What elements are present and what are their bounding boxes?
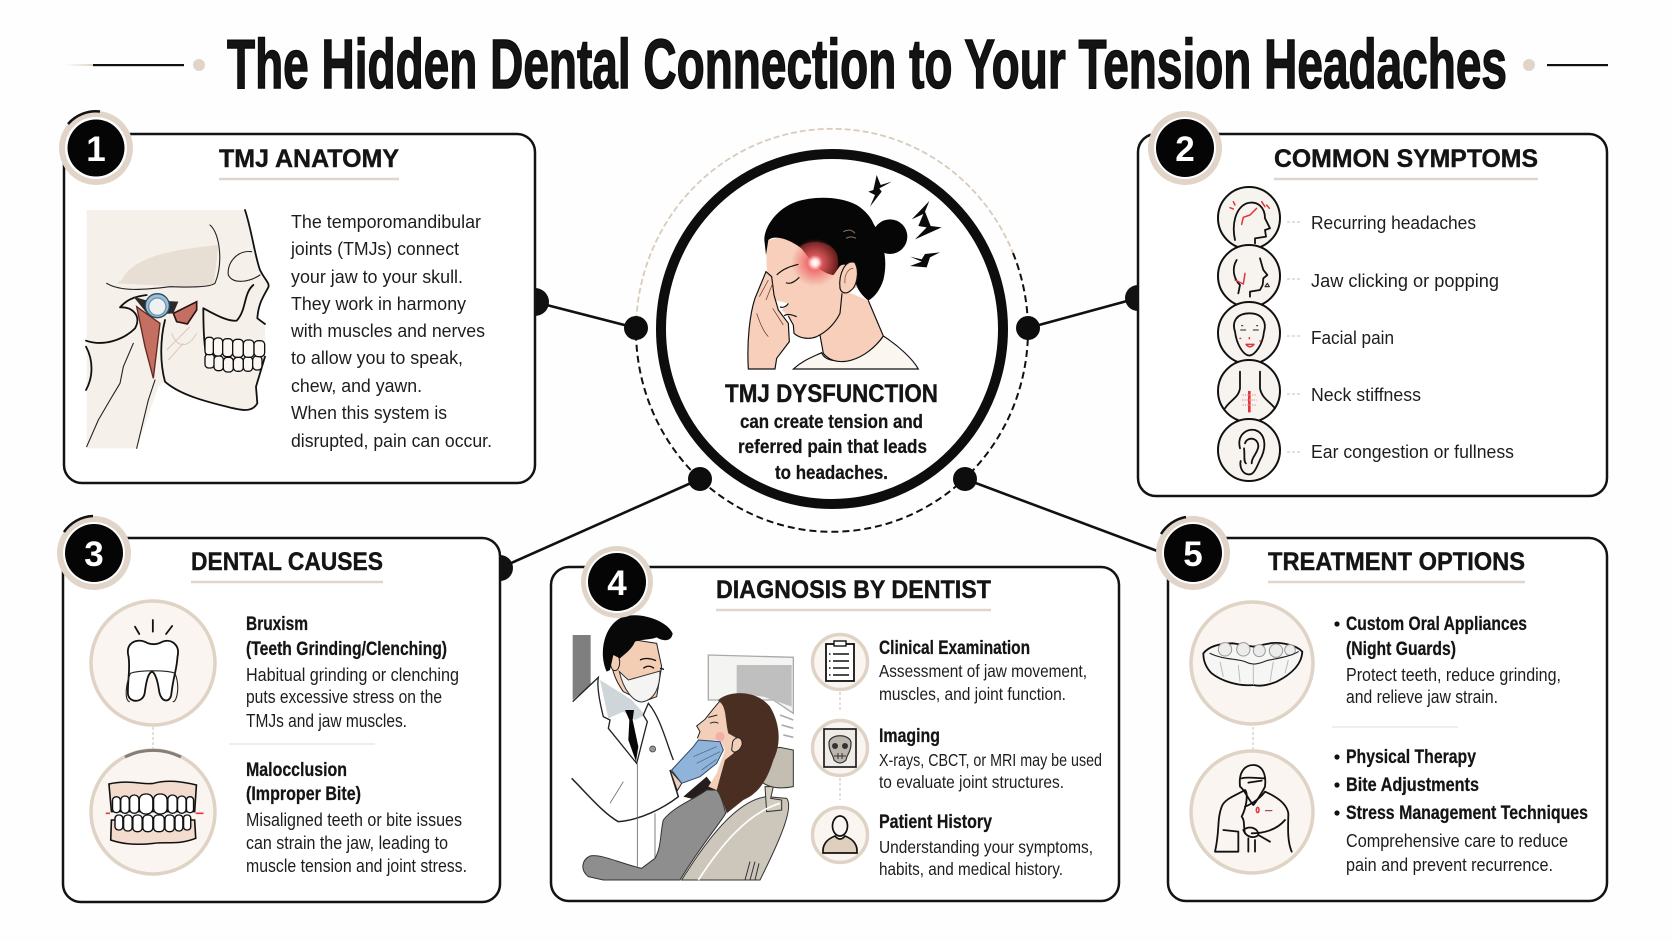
icon: physical therapy: [1191, 751, 1313, 873]
badge 4: [581, 546, 653, 618]
title ornament left: [64, 59, 205, 71]
item: patient history: Understanding your symptoms,: [879, 837, 1093, 857]
heading: COMMON SYMPTOMS: [1274, 145, 1538, 173]
badge 3: [57, 516, 131, 590]
center text: to headaches.: [775, 463, 888, 484]
item: clinical examination: Assessment of jaw movement,: [879, 661, 1087, 681]
item: clinical examination: muscles, and joint function.: [879, 684, 1066, 704]
divider: [1332, 726, 1458, 728]
dentist coat: [572, 677, 678, 880]
item: imaging: X-rays, CBCT, or MRI may be used: [879, 750, 1102, 770]
text: oral appliances: Custom Oral Appliances: [1346, 614, 1527, 635]
symptom: neck stiffness: [1218, 360, 1421, 422]
text: malocclusion: Malocclusion: [246, 760, 347, 781]
center text: TMJ DYSFUNCTION: [725, 380, 938, 408]
text: other treatments: Physical Therapy: [1346, 747, 1476, 768]
panel frame: [551, 567, 1119, 901]
panel 3: dental causes: [57, 516, 500, 902]
text: bruxism: (Teeth Grinding/Clenching): [246, 639, 447, 660]
badge 2: [1148, 111, 1222, 185]
panel frame: [64, 134, 535, 483]
text: oral appliances: (Night Guards): [1346, 639, 1456, 660]
icon: stressed tooth: [91, 601, 215, 725]
hub node dots: [624, 316, 1040, 491]
heading: TMJ ANATOMY: [219, 145, 399, 173]
text: bruxism: puts excessive stress on the: [246, 687, 442, 707]
body text: disrupted, pain can occur.: [291, 431, 492, 451]
patient body: [583, 790, 726, 880]
symptom: jaw clicking: Jaw clicking or popping: [1311, 271, 1499, 291]
text: other treatments: [1334, 747, 1588, 875]
panel 2: common symptoms: [1138, 111, 1607, 496]
illustration: woman with headache: [748, 175, 942, 369]
symptom: jaw clicking: [1218, 245, 1499, 307]
center text: [725, 380, 938, 484]
text: malocclusion: muscle tension and joint stress.: [246, 856, 467, 876]
text: oral appliances: [1334, 614, 1561, 707]
item: imaging: [812, 720, 1102, 792]
badge 5: 5: [1183, 535, 1203, 574]
symptom: ear congestion: Ear congestion or fullness: [1311, 442, 1514, 462]
body text: chew, and yawn.: [291, 376, 422, 396]
center text: can create tension and: [740, 412, 923, 433]
item: patient history: habits, and medical history.: [879, 859, 1063, 879]
item: imaging: Imaging: [879, 726, 940, 747]
panel 4: diagnosis by dentist: [551, 546, 1119, 901]
body text: When this system is: [291, 403, 447, 423]
badge 4: 4: [607, 564, 627, 603]
panel 1: TMJ anatomy: [59, 111, 535, 483]
dental chair: [682, 747, 793, 880]
back equipment: [573, 635, 591, 700]
text: oral appliances: Protect teeth, reduce grinding,: [1346, 665, 1561, 685]
badge 3: 3: [84, 535, 104, 574]
item: clinical examination: [812, 634, 1087, 704]
item: patient history: [812, 808, 1093, 879]
item: patient history: Patient History: [879, 812, 992, 833]
heading: DENTAL CAUSES: [191, 548, 383, 576]
badge 1: 1: [86, 130, 106, 169]
connector between treatment icons: [1252, 727, 1254, 749]
body text: They work in harmony: [291, 294, 466, 314]
illustration: dentist examining patient: [572, 615, 793, 880]
symptom: facial pain: Facial pain: [1311, 328, 1394, 348]
connector between cause icons: [152, 727, 154, 749]
title ornament right: [1523, 59, 1608, 71]
body text: to allow you to speak,: [291, 348, 463, 368]
text: bruxism: [246, 614, 459, 731]
panel frame: [63, 538, 500, 902]
icon: night guard: [1191, 602, 1313, 724]
body text: joints (TMJs) connect: [290, 239, 459, 259]
divider: [229, 743, 375, 745]
symptom: neck stiffness: Neck stiffness: [1311, 385, 1421, 405]
dentist head: [603, 615, 673, 702]
skull anatomy illustration: [86, 210, 269, 448]
panel frame: [1138, 134, 1607, 496]
symptom: ear congestion: [1218, 419, 1514, 481]
panel 5: treatment options: [1156, 516, 1607, 901]
text: bruxism: TMJs and jaw muscles.: [246, 711, 407, 731]
patient hair: [717, 693, 779, 813]
text: malocclusion: [246, 760, 467, 876]
dashed outer ring: [636, 129, 1028, 532]
text: bruxism: Bruxism: [246, 614, 308, 635]
patient face: [697, 702, 742, 790]
text: other treatments: Comprehensive care to reduce: [1346, 831, 1568, 851]
central hub: [624, 129, 1040, 532]
heading: TREATMENT OPTIONS: [1268, 548, 1525, 576]
wall monitor: [708, 655, 793, 737]
connector between diagnosis icons: [839, 692, 841, 800]
text: oral appliances: and relieve jaw strain.: [1346, 687, 1498, 707]
body text: with muscles and nerves: [290, 321, 485, 341]
center text: referred pain that leads: [738, 437, 927, 458]
text: bruxism: Habitual grinding or clenching: [246, 665, 459, 685]
icon: misaligned teeth: [91, 750, 215, 874]
body text: your jaw to your skull.: [291, 267, 463, 287]
text: malocclusion: can strain the jaw, leading to: [246, 833, 448, 853]
text: other treatments: pain and prevent recurrence.: [1346, 855, 1553, 875]
gloved hand: [670, 740, 723, 791]
connector lines from center to panels: [487, 285, 1168, 581]
heading: DIAGNOSIS BY DENTIST: [716, 576, 991, 604]
badge 5: [1156, 516, 1230, 590]
panel frame: [1168, 538, 1607, 901]
text: other treatments: Stress Management Techniques: [1346, 803, 1588, 824]
body text: [290, 212, 492, 451]
symptom: facial pain: [1218, 302, 1394, 364]
badge 1: [59, 111, 133, 185]
body text: The temporomandibular: [291, 212, 481, 232]
badge 2: 2: [1175, 130, 1195, 169]
text: malocclusion: (Improper Bite): [246, 784, 361, 805]
central ring: [661, 154, 1003, 504]
text: other treatments: Bite Adjustments: [1346, 775, 1479, 796]
item: clinical examination: Clinical Examination: [879, 638, 1030, 659]
symptom: recurring headaches: [1218, 187, 1476, 249]
text: malocclusion: Misaligned teeth or bite issues: [246, 810, 462, 830]
item: imaging: to evaluate joint structures.: [879, 772, 1064, 792]
symptom: recurring headaches: Recurring headaches: [1311, 213, 1476, 233]
